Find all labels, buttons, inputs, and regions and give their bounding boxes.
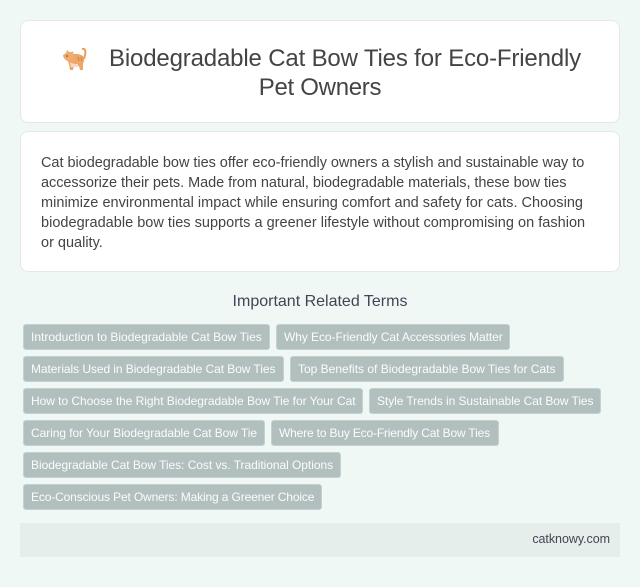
tag list (23, 324, 601, 510)
tag (23, 420, 265, 446)
tag (23, 388, 363, 414)
tag: Caring for Your Biodegradable Cat Bow Tie (31, 426, 257, 440)
heading (109, 45, 581, 101)
tag: Why Eco-Friendly Cat Accessories Matter (284, 330, 503, 344)
tag (23, 484, 322, 510)
tag (23, 324, 270, 350)
tag: Where to Buy Eco-Friendly Cat Bow Ties (279, 426, 490, 440)
tag: Biodegradable Cat Bow Ties: Cost vs. Traditional Options (31, 458, 333, 472)
intro paragraph: accessorize their pets. Made from natural, biodegradable materials, these bow ties (41, 175, 566, 191)
tag: Top Benefits of Biodegradable Bow Ties for Cats (298, 362, 555, 376)
footer credit: catknowy.com (532, 532, 610, 546)
intro paragraph: biodegradable bow ties supports a greener lifestyle without compromising on fashion (41, 215, 585, 231)
footer bar (20, 523, 620, 557)
tag: Eco-Conscious Pet Owners: Making a Greener Choice (31, 490, 314, 504)
tag (271, 420, 499, 446)
tag (276, 324, 510, 350)
tag (369, 388, 601, 414)
icon: cat (63, 48, 86, 70)
intro paragraph (41, 155, 585, 251)
tag: How to Choose the Right Biodegradable Bow Tie for Your Cat (31, 394, 356, 408)
tag (290, 356, 564, 382)
tag (23, 452, 341, 478)
title card (20, 20, 620, 123)
heading: Pet Owners (259, 74, 381, 101)
intro paragraph: or quality. (41, 235, 103, 251)
heading: Biodegradable Cat Bow Ties for Eco-Friendly (109, 45, 581, 72)
tag: Materials Used in Biodegradable Cat Bow Ties (31, 362, 275, 376)
intro text card (20, 131, 620, 272)
intro paragraph: Cat biodegradable bow ties offer eco-friendly owners a stylish and sustainable way to (41, 155, 584, 171)
tag: Style Trends in Sustainable Cat Bow Ties (377, 394, 593, 408)
intro paragraph: minimize environmental impact while ensuring comfort and safety for cats. Choosing (41, 195, 583, 211)
tag (23, 356, 284, 382)
tag: Introduction to Biodegradable Cat Bow Ties (31, 330, 262, 344)
section heading: Important Related Terms (233, 293, 407, 310)
